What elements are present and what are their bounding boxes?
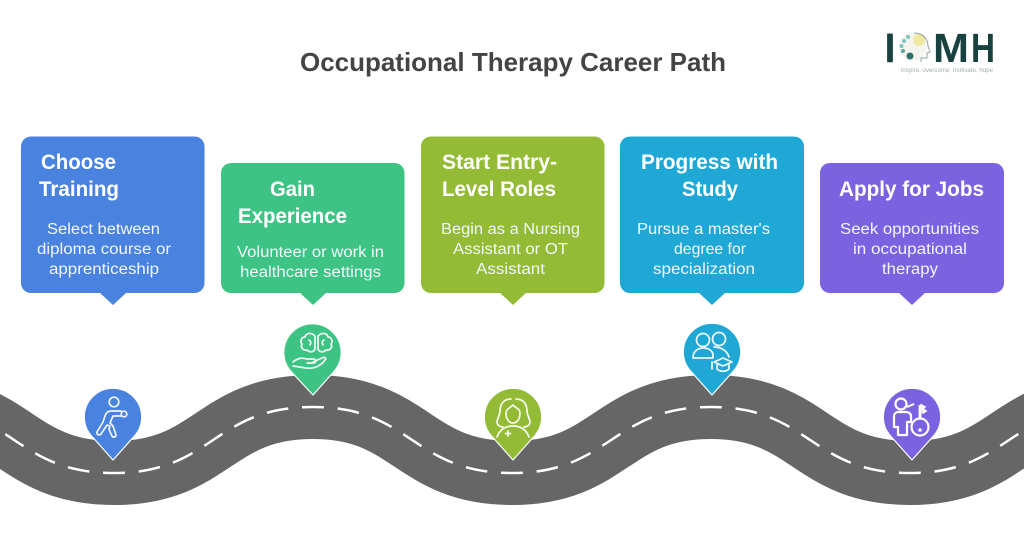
logo: IOMH: inspire, overcome, motivate, hope (901, 67, 993, 74)
panel: Choose Training: apprenticeship (49, 261, 159, 278)
icon: olive pin with nurse (484, 388, 542, 460)
icon: green pin with brain in hand (284, 324, 341, 395)
panel: Gain Experience: Experience (238, 205, 347, 228)
panel: Progress with Study: Study (682, 178, 738, 201)
road (0, 407, 1024, 473)
panel: Gain Experience (221, 163, 404, 305)
logo: IOMH: H (971, 25, 995, 71)
panel: Progress with Study: specialization (653, 261, 755, 278)
panel: Start Entry-Level Roles: Assistant or OT (453, 241, 569, 258)
icon: blue pin with exercising figure (84, 388, 142, 460)
panel: Start Entry-Level Roles: Start Entry- (442, 151, 557, 174)
panel: Apply for Jobs: therapy (882, 261, 938, 278)
panel: Choose Training: diploma course or (37, 241, 171, 258)
title: Occupational Therapy Career Path (300, 47, 726, 77)
panel: Choose Training: Training (39, 178, 119, 201)
panel: Progress with Study: Progress with (641, 151, 778, 174)
panel: Gain Experience: healthcare settings (240, 264, 381, 281)
panel: Apply for Jobs (820, 163, 1004, 305)
panel: Apply for Jobs: Apply for Jobs (839, 178, 984, 201)
panel: Choose Training: Select between (47, 221, 160, 238)
panel: Start Entry-Level Roles: Begin as a Nursing (441, 221, 580, 238)
panel: Progress with Study: Pursue a master's (637, 221, 770, 238)
logo: IOMH: M (933, 25, 969, 71)
panel: Gain Experience: Gain (270, 178, 315, 201)
logo: IOMH (885, 25, 995, 74)
icon: purple pin with person and key (883, 388, 941, 460)
panel: Start Entry-Level Roles (421, 136, 604, 305)
panel: Start Entry-Level Roles: Level Roles (442, 178, 556, 201)
panel: Gain Experience: Volunteer or work in (237, 244, 384, 261)
panel: Apply for Jobs: Seek opportunities (840, 221, 979, 238)
panel: Choose Training (21, 136, 204, 305)
panel: Choose Training: Choose (41, 151, 116, 174)
panel: Apply for Jobs: in occupational (853, 241, 967, 258)
panel: Progress with Study (620, 136, 804, 305)
panel: Start Entry-Level Roles: Assistant (476, 261, 546, 278)
panel: Progress with Study: degree for (674, 241, 746, 258)
logo: IOMH: I (885, 25, 895, 71)
icon: cyan pin with graduates (683, 323, 741, 395)
